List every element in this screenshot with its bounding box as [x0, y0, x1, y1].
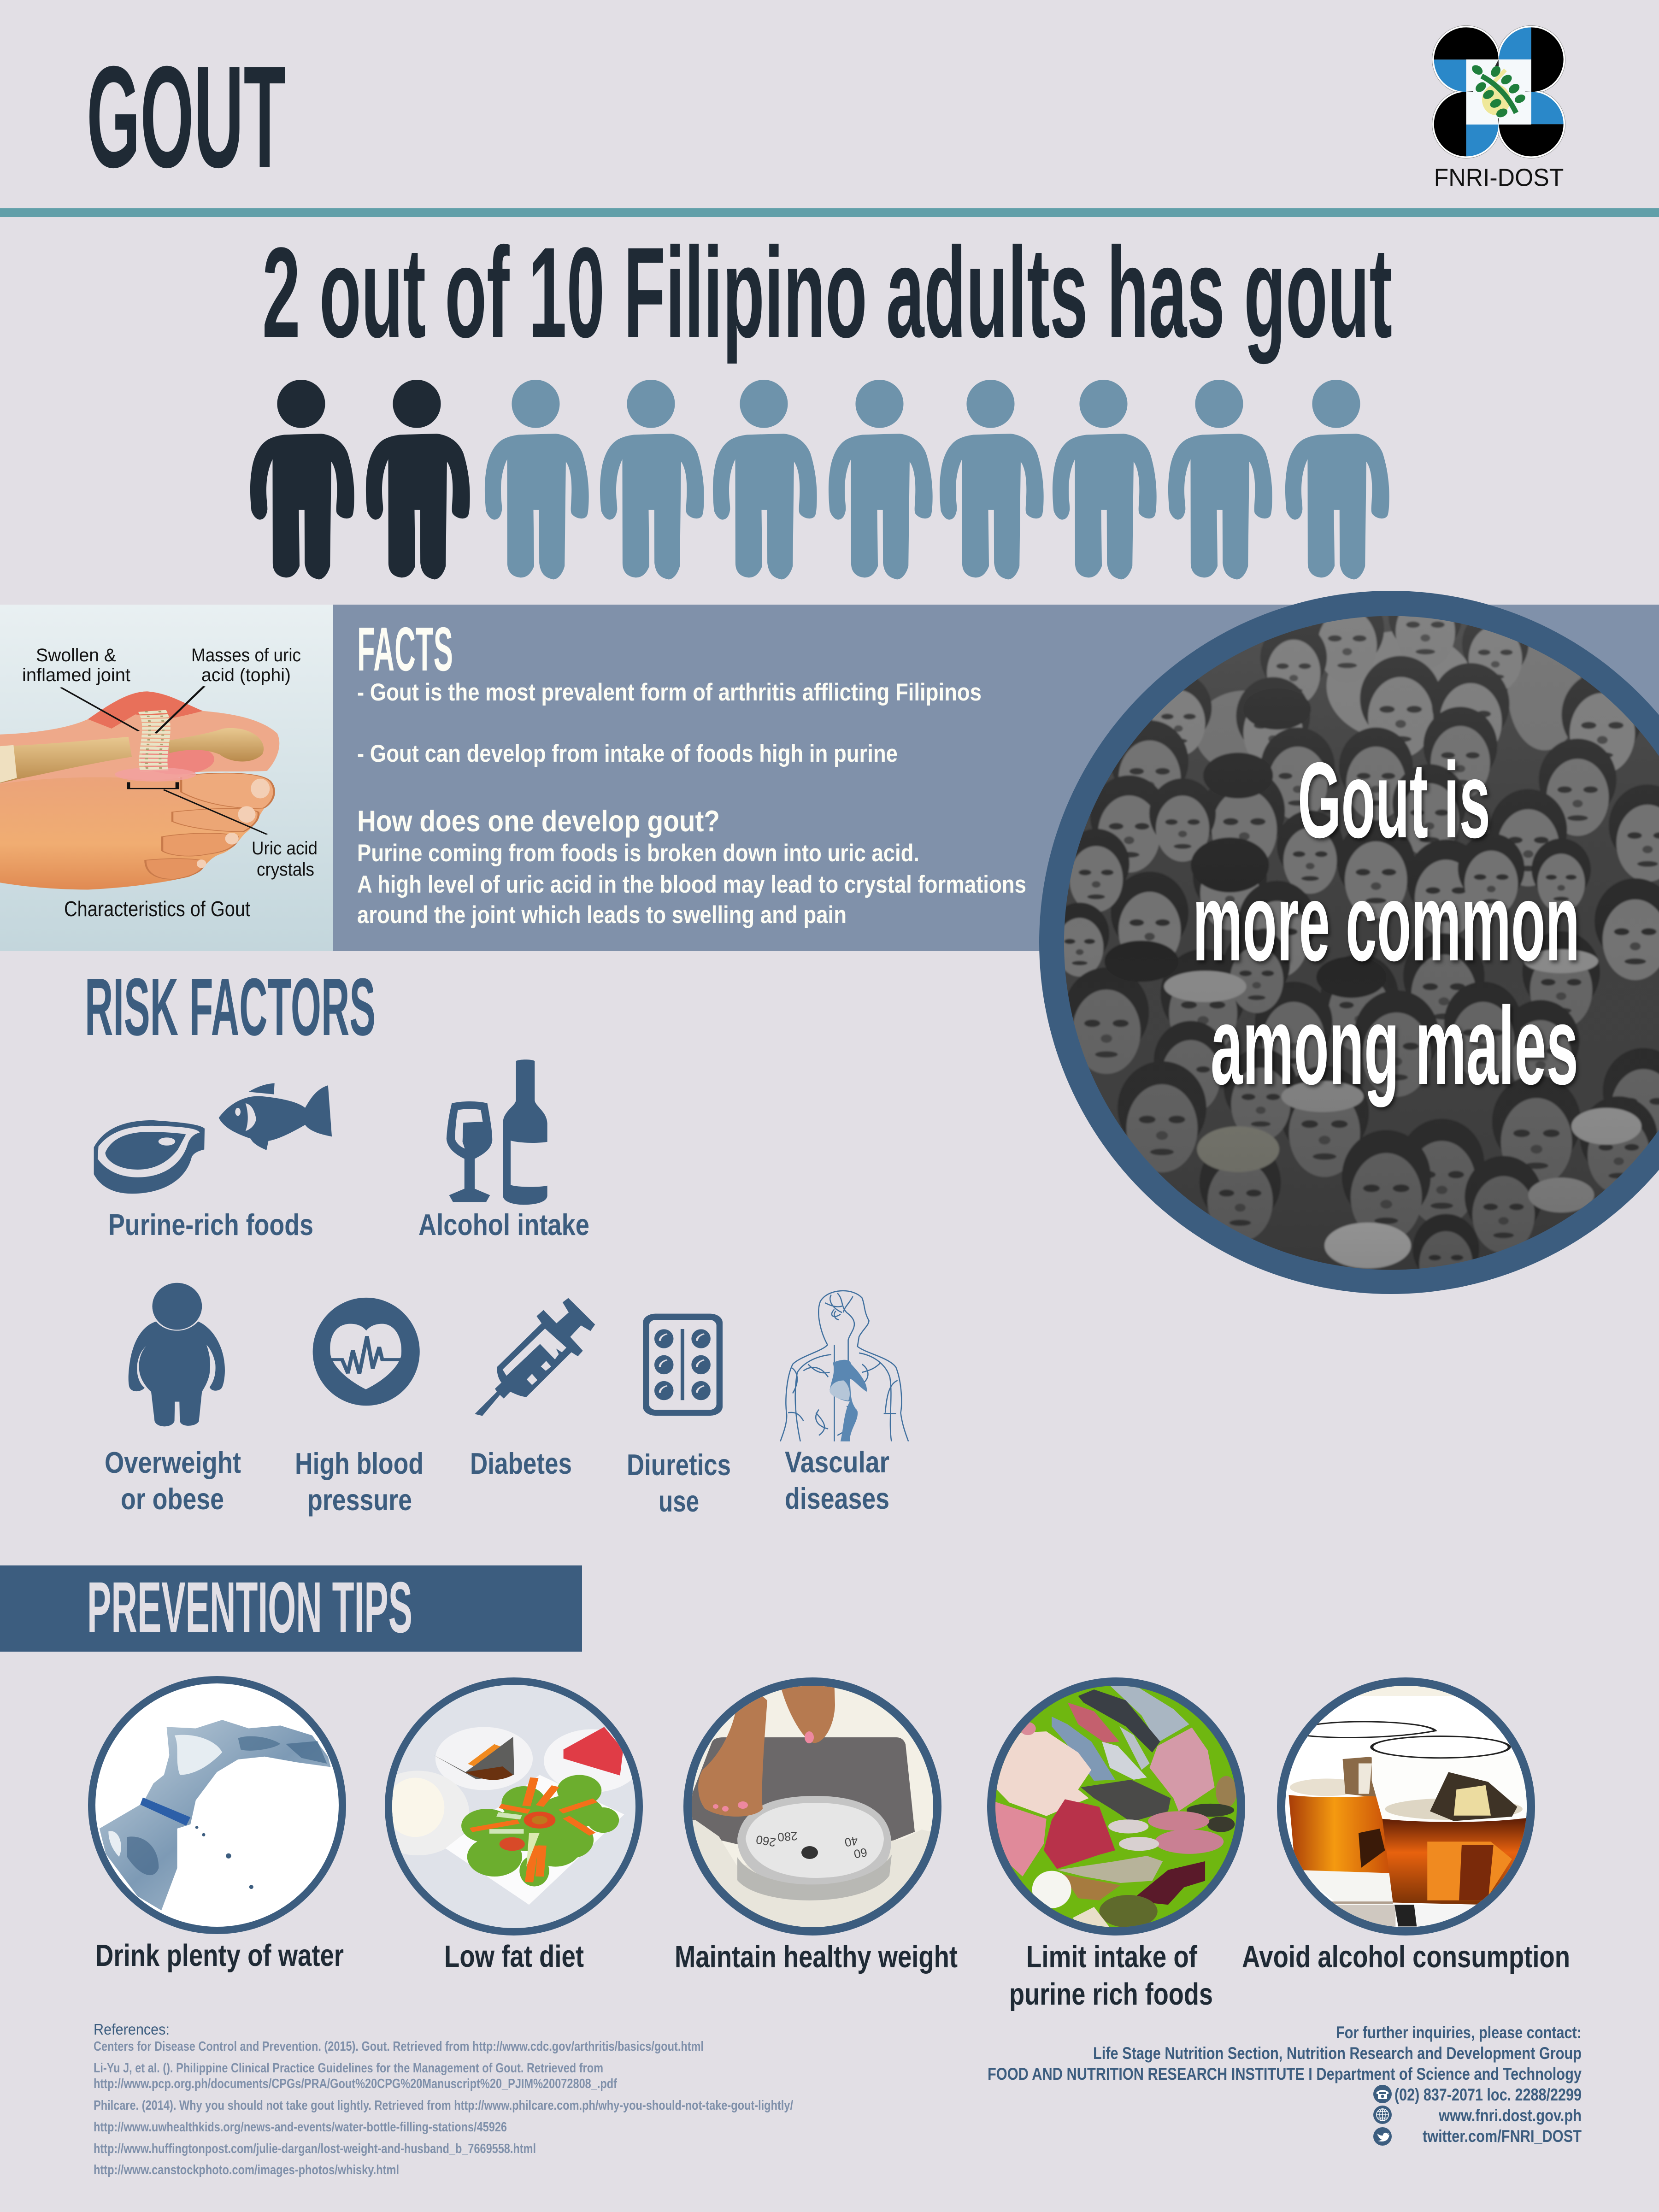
icon: overweight person [129, 1283, 225, 1426]
text block: contact information: twitter.com/FNRI_DOST [1423, 2127, 1582, 2146]
logo: FNRI-DOST: FNRI-DOST [1434, 164, 1564, 191]
text block: references [94, 2021, 793, 2177]
image: feet on weighing scale [682, 1677, 945, 1940]
icon: pill blister pack [643, 1314, 723, 1416]
text block: facts [357, 614, 1026, 929]
text: GOUT [87, 36, 286, 198]
image: feet on weighing scale: 260 [755, 1833, 777, 1850]
image: feet on weighing scale: 280 [777, 1829, 798, 1844]
text block: references: Centers for Disease Control and Prevention. (2015). Gout. Retrieved from http://www.cdc.gov/arthritis/basics/gout.html [94, 2039, 704, 2054]
text block: references: http://www.uwhealthkids.org/news-and-events/water-bottle-filling-stations/45926 [94, 2120, 507, 2135]
icon: vascular system figure [780, 1291, 908, 1441]
text block: contact information: For further inquiries, please contact: [1336, 2023, 1582, 2042]
logo: FNRI-DOST [1432, 25, 1565, 191]
text: RISK FACTORS [85, 961, 376, 1053]
label: diuretics use: Diuretics [627, 1448, 731, 1482]
image: feet on weighing scale: 60 [853, 1845, 868, 1861]
heading band: prevention tips: PREVENTION TIPS [87, 1567, 412, 1648]
text block: contact information [988, 2023, 1582, 2146]
text block: contact information: (02) 837-2071 loc. 2288/2299 [1394, 2085, 1582, 2104]
label: limit intake of purine rich foods [1009, 1940, 1213, 2012]
panel: characteristics of gout foot diagram: Characteristics of Gout [64, 897, 250, 921]
panel: facts background [333, 605, 1659, 951]
icon: telephone [1373, 2085, 1392, 2103]
icon: wine glass and bottle [447, 1059, 547, 1205]
label: alcohol intake: Alcohol intake [418, 1208, 589, 1241]
fact 2: - Gout can develop from intake of foods high in purine [357, 740, 898, 767]
text block: references: http://www.canstockphoto.com/images-photos/whisky.html [94, 2163, 399, 2177]
image: purine rich foods [986, 1677, 1249, 1940]
label: vascular diseases [785, 1445, 889, 1515]
text block: references: Li-Yu J, et al. (). Philippine Clinical Practice Guidelines for the Management of Gout. Retrieved from [94, 2061, 603, 2076]
label: vascular diseases: diseases [785, 1482, 889, 1515]
explanation: around the joint which leads to swelling and pain [357, 901, 847, 929]
label: diabetes: Diabetes [470, 1447, 572, 1480]
text block: references: Philcare. (2014). Why you should not take gout lightly. Retrieved from http://www.philcare.com.ph/why-you-should-not-take-gout-lightly/ [94, 2098, 793, 2113]
panel: risk factors [94, 1059, 908, 1518]
text block: contact information: www.fnri.dost.gov.ph [1438, 2106, 1582, 2125]
panel: characteristics of gout foot diagram: Masses of uric [191, 645, 301, 665]
callout text: gout is more common among males: Gout is [1298, 740, 1490, 860]
divider bar [0, 208, 1659, 217]
label: diuretics use: use [659, 1484, 699, 1518]
image: feet on weighing scale: 40 [843, 1834, 859, 1850]
explanation: Purine coming from foods is broken down into uric acid. [357, 840, 919, 867]
label: high blood pressure: High blood [295, 1447, 424, 1480]
icon: meat and fish [94, 1083, 332, 1194]
fact 1: - Gout is the most prevalent form of arthritis afflicting Filipinos [357, 679, 982, 706]
pictogram: 2 of 10 people [250, 380, 1389, 579]
label: maintain healthy weight: Maintain healthy weight [675, 1940, 958, 1974]
crowd photo [1064, 616, 1659, 1270]
text block: references: http://www.pcp.org.ph/documents/CPGs/PRA/Gout%20CPG%20Manuscript%20_PJIM%20072808_.pdf [94, 2077, 617, 2091]
image: whisky glasses [1277, 1677, 1539, 1940]
explanation [357, 840, 1026, 929]
panel: characteristics of gout foot diagram: Swollen & [36, 645, 116, 665]
label: limit intake of purine rich foods: Limit intake of [1026, 1940, 1198, 1974]
text block: references: References: [94, 2021, 170, 2038]
image: low fat meal [367, 1677, 645, 1940]
panel: characteristics of gout foot diagram: crystals [257, 859, 314, 880]
label: drink plenty of water: Drink plenty of water [95, 1938, 344, 1973]
heading band: prevention tips [0, 1565, 582, 1652]
icon: syringe [475, 1298, 595, 1416]
panel: characteristics of gout foot diagram [0, 605, 333, 951]
label: avoid alcohol consumption: Avoid alcohol consumption [1242, 1940, 1570, 1974]
explanation: A high level of uric acid in the blood may lead to crystal formations [357, 871, 1026, 898]
icon: globe [1373, 2106, 1392, 2124]
image: water bottle splash [88, 1673, 346, 1940]
panel: crowd circle callout [1039, 576, 1659, 1297]
text block: facts: FACTS [357, 614, 453, 684]
label: high blood pressure [295, 1447, 424, 1517]
label: overweight or obese: Overweight [105, 1446, 241, 1479]
label: overweight or obese: or obese [121, 1482, 224, 1516]
label: purine-rich foods: Purine-rich foods [108, 1208, 313, 1241]
label: low fat diet: Low fat diet [444, 1939, 584, 1974]
panel: prevention tips [88, 1673, 1570, 2012]
label: vascular diseases: Vascular [785, 1445, 889, 1479]
subheading: how does one develop gout: How does one develop gout? [357, 804, 720, 838]
callout text: gout is more common among males [1193, 740, 1580, 1107]
icon: twitter bird [1373, 2127, 1392, 2146]
panel: characteristics of gout foot diagram: Uric acid [252, 838, 318, 859]
panel: characteristics of gout foot diagram: acid (tophi) [201, 665, 291, 685]
text block: references: http://www.huffingtonpost.com/julie-dargan/lost-weight-and-husband_b_7669558.html [94, 2141, 536, 2156]
panel: characteristics of gout foot diagram: inflamed joint [22, 665, 130, 685]
label: overweight or obese [105, 1446, 241, 1516]
icon: heart pulse [313, 1298, 420, 1406]
label: diuretics use [627, 1448, 731, 1518]
label: limit intake of purine rich foods: purine rich foods [1009, 1977, 1213, 2012]
label: high blood pressure: pressure [307, 1483, 412, 1517]
